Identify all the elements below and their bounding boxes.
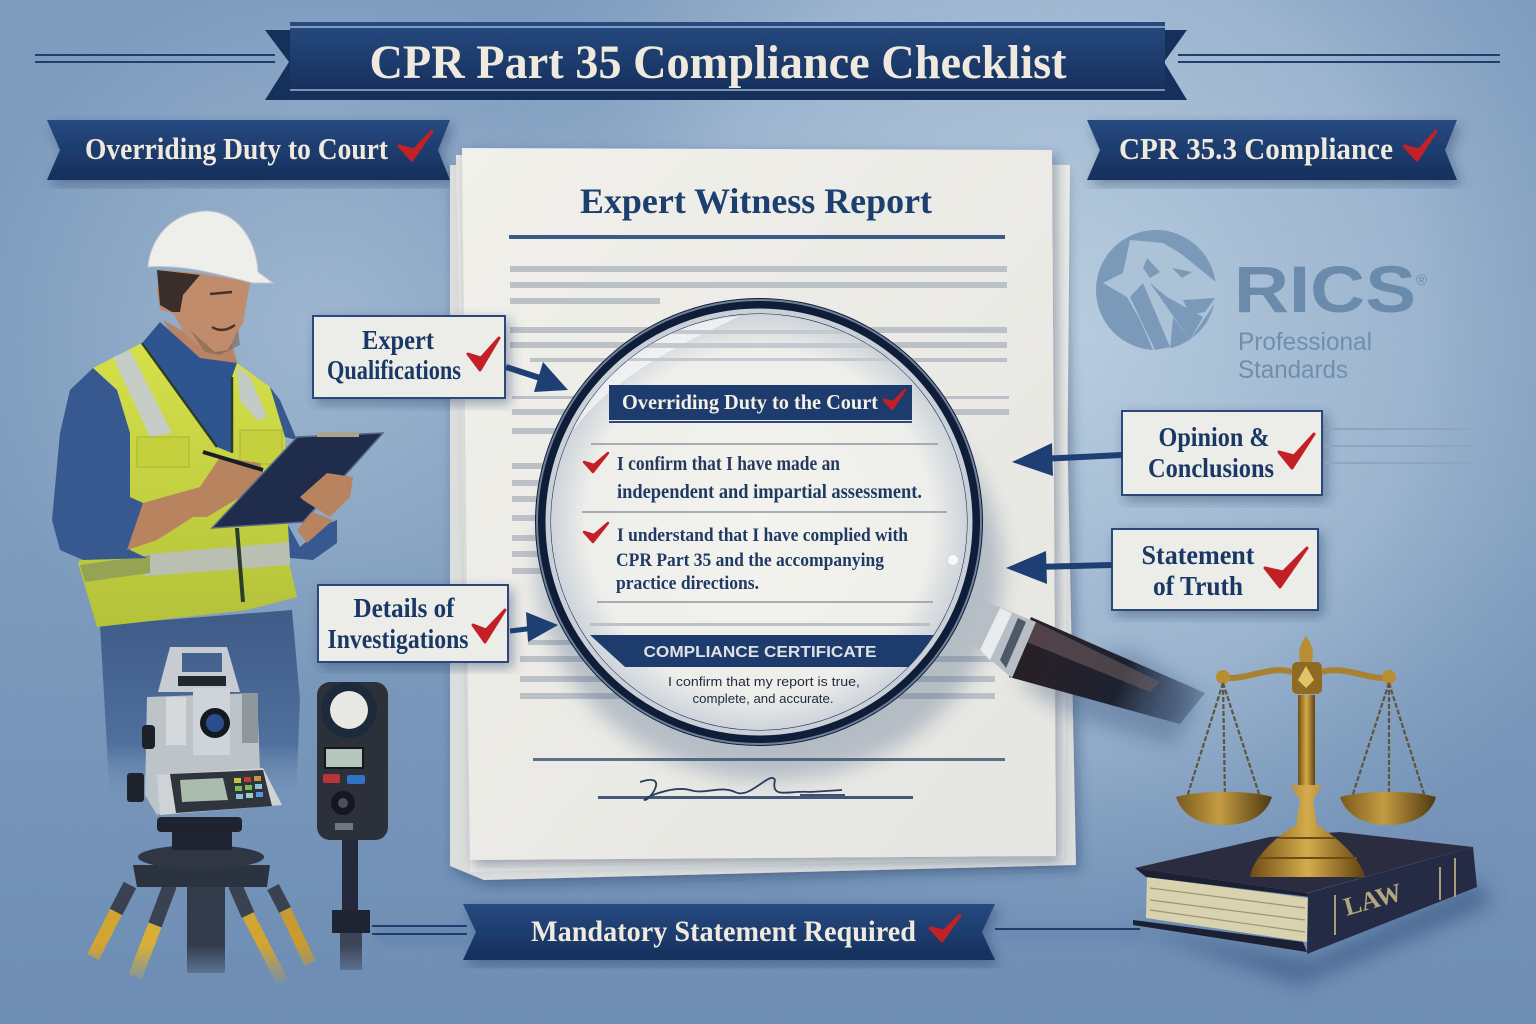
compliance certificate band (590, 635, 945, 667)
hard hat (148, 211, 273, 283)
instrument body (145, 693, 262, 815)
pen (203, 452, 263, 470)
icon: red check (399, 131, 432, 160)
RICS logo: Professional (1238, 328, 1372, 356)
forearm and writing hand (127, 457, 263, 550)
book shadow (1125, 880, 1490, 985)
statement two: practice directions. (616, 573, 759, 594)
law book (1125, 832, 1490, 985)
callout: opinion and conclusions (1122, 411, 1322, 495)
certificate text: I confirm that my report is true, (668, 674, 860, 689)
RICS logo: ® (1416, 272, 1427, 289)
light meter on stand (317, 682, 388, 970)
callout: expert qualifications: Expert (362, 325, 434, 355)
title banner: CPR Part 35 Compliance Checklist (370, 36, 1067, 89)
callout: details of investigations: Investigations (328, 624, 468, 654)
ribbon: overriding duty to court (47, 120, 450, 180)
callout: statement of truth: of Truth (1153, 571, 1243, 601)
statement one (584, 453, 922, 503)
instrument console (157, 768, 282, 815)
arrow: opinion to lens (1012, 443, 1122, 476)
icon: red check (1404, 131, 1436, 160)
callout: expert qualifications (313, 316, 505, 398)
ribbon: overriding duty to court: Overriding Duty to Court (85, 131, 389, 166)
callout: details of investigations (318, 585, 508, 662)
document: expert witness report (450, 148, 1076, 880)
vest (78, 343, 297, 627)
foreground fade at base of instruments (85, 945, 385, 987)
total station on tripod (93, 647, 310, 983)
arrow: expert qualifications to lens (506, 362, 568, 392)
decorative lines right of opinion callout (1325, 428, 1470, 464)
statement one: I confirm that I have made an (617, 453, 840, 475)
icon: red check (1265, 548, 1307, 587)
document heading: Expert Witness Report (580, 181, 932, 221)
callout: expert qualifications: Qualifications (327, 355, 461, 385)
arrow: statement to lens (1006, 551, 1112, 584)
right hand and forearm (297, 512, 333, 543)
icon: red check (930, 915, 960, 941)
worker with clipboard (52, 211, 383, 800)
instrument handle (158, 647, 240, 692)
callout: statement of truth (1112, 529, 1318, 610)
handle (967, 600, 1205, 724)
statement two: CPR Part 35 and the accompanying (616, 550, 884, 571)
neck (163, 320, 240, 392)
icon: red check (1279, 434, 1314, 468)
RICS logo (1096, 230, 1427, 384)
callout: opinion and conclusions: Conclusions (1148, 453, 1274, 483)
arrow: investigations to lens (510, 612, 558, 642)
ribbon: mandatory statement required: Mandatory Statement Required (531, 915, 916, 948)
icon: red check (884, 390, 905, 409)
lens shadow (538, 360, 1002, 780)
certificate text: complete, and accurate. (692, 691, 834, 706)
lens header: Overriding Duty to the Court (622, 390, 878, 414)
ribbon: CPR 35.3 compliance (1087, 120, 1457, 180)
right sleeve (270, 387, 297, 440)
RICS logo: RICS (1234, 252, 1416, 326)
left sleeve (52, 368, 147, 560)
law book: LAW (1340, 877, 1405, 922)
statement two (584, 523, 908, 594)
ribbon: mandatory statement required (372, 904, 1140, 960)
book pages (1146, 877, 1308, 942)
head (157, 270, 250, 353)
shirt front (143, 322, 237, 460)
handle shadow (1015, 650, 1200, 745)
lens header (609, 385, 912, 423)
clipboard (212, 433, 383, 528)
callout: opinion and conclusions: Opinion & (1158, 422, 1270, 452)
scales of justice (1176, 636, 1436, 877)
book spine (1307, 847, 1477, 954)
compliance certificate band: COMPLIANCE CERTIFICATE (644, 644, 877, 661)
callout: details of investigations: Details of (354, 593, 455, 623)
magnifying glass (535, 298, 1205, 780)
ribbon: CPR 35.3 compliance: CPR 35.3 Compliance (1119, 131, 1393, 166)
statement two: I understand that I have complied with (617, 525, 908, 546)
icon: red check (468, 338, 499, 370)
certificate text (669, 676, 859, 706)
signature (640, 778, 845, 800)
statement one: independent and impartial assessment. (617, 481, 922, 503)
callout: statement of truth: Statement (1142, 540, 1255, 570)
RICS logo: Standards (1238, 356, 1348, 384)
trousers (100, 610, 300, 800)
icon: red check (473, 610, 505, 642)
title banner (35, 22, 1500, 100)
